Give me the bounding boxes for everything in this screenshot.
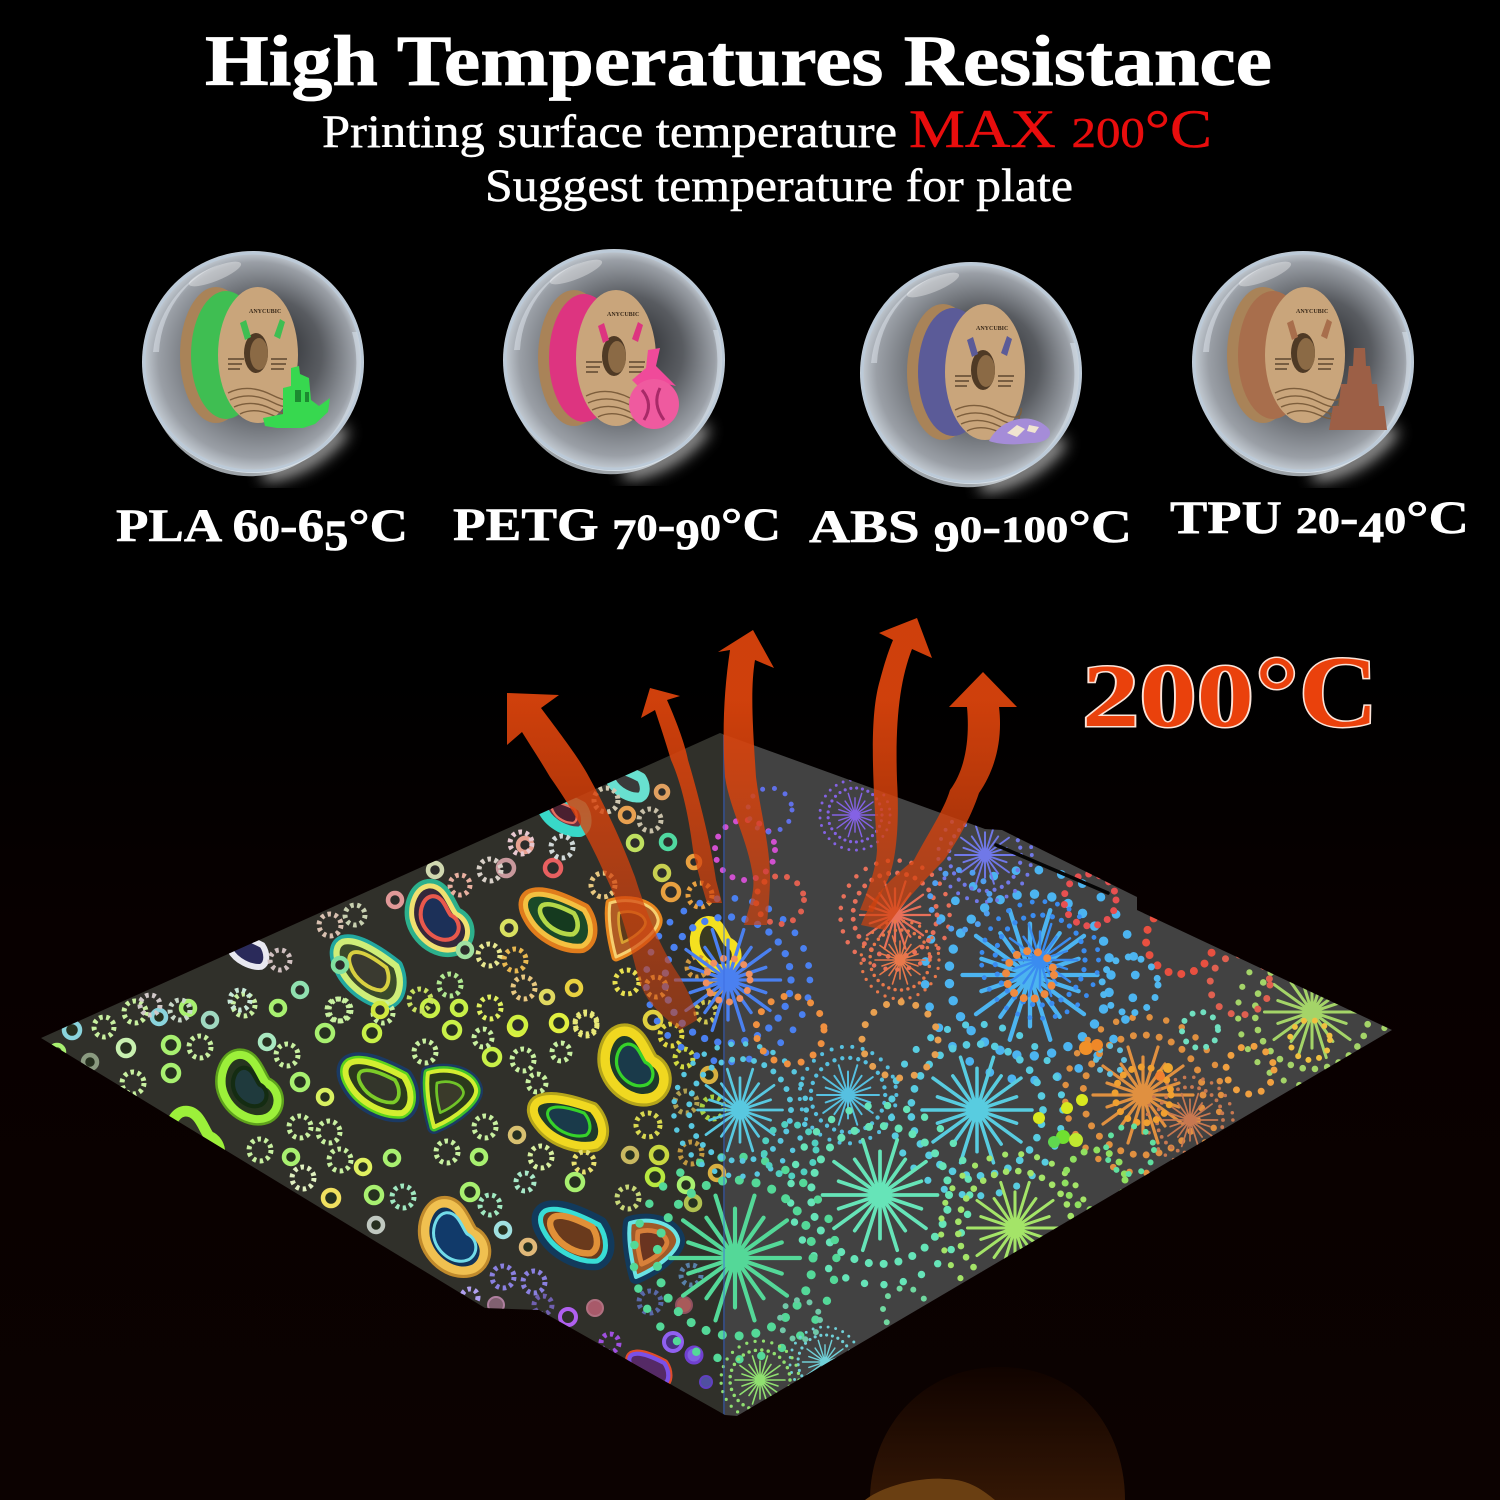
label: ABS: -100°C bbox=[982, 501, 1121, 553]
plate left: upper multicolour rings bbox=[203, 786, 722, 1033]
label: PETG: 7 bbox=[612, 512, 637, 559]
label: PLA: PLA 6 0-6 bbox=[116, 500, 319, 552]
plate centre seam bbox=[723, 735, 725, 1416]
plate slit bbox=[996, 845, 1108, 893]
material: TPU bbox=[1170, 251, 1469, 552]
label: PETG: °C bbox=[721, 499, 774, 551]
icon: ABS bubble with purple spool and printed part bbox=[860, 262, 1082, 487]
arrow 5 bbox=[861, 672, 1017, 930]
icon: PLA bubble with green spool and boat bbox=[142, 251, 364, 476]
label: TPU: 0 bbox=[1384, 501, 1406, 542]
label: PETG: 0 bbox=[700, 508, 721, 549]
label: ABS: 9 bbox=[934, 514, 960, 561]
plate right: bright highlight dots bbox=[1033, 1039, 1173, 1148]
label: PLA: 5 bbox=[324, 513, 348, 560]
plate base bbox=[41, 733, 1392, 1416]
arrow 1 bbox=[507, 693, 697, 1030]
label: PETG: PETG bbox=[453, 499, 581, 551]
plate left: green rings bbox=[50, 1000, 724, 1254]
plate left: purple lower rings bbox=[462, 1265, 712, 1388]
subtitle: suggested plate temperature: Suggest temperature for plate bbox=[485, 160, 1073, 212]
material: PLA bbox=[116, 251, 408, 560]
icon: PETG bubble with pink spool and pumpkin bbox=[503, 249, 725, 474]
subtitle: maximum surface temperature bbox=[322, 99, 1212, 159]
material: ABS bbox=[809, 262, 1132, 561]
arrow 3 bbox=[718, 630, 774, 925]
arrow 2 bbox=[641, 688, 722, 903]
label: PETG: 9 bbox=[675, 512, 700, 559]
label: PLA: °C bbox=[348, 500, 408, 552]
material: PETG bbox=[453, 249, 781, 559]
subtitle: maximum surface temperature: MAX 200°C bbox=[909, 99, 1212, 159]
label: ABS: ABS bbox=[809, 501, 900, 553]
temperature callout: 200°C: 200 bbox=[1082, 647, 1254, 746]
plate right half: fireworks bbox=[634, 780, 1386, 1419]
title: High Temperatures Resistance bbox=[205, 21, 1272, 101]
build plate bbox=[41, 733, 1392, 1416]
arrow 4 bbox=[860, 618, 932, 912]
label: TPU: °C bbox=[1406, 492, 1459, 544]
subtitle: maximum surface temperature: Printing surface temperature bbox=[322, 106, 897, 158]
background glow: lower bokeh bbox=[865, 1367, 1125, 1500]
label: ABS: 0 bbox=[960, 510, 982, 551]
icon: TPU bubble with brown spool and pagoda bbox=[1192, 251, 1414, 476]
plate left half: heart pattern bbox=[50, 769, 737, 1388]
temperature callout: 200°C: °C bbox=[1255, 636, 1378, 749]
plate right: burst cores and dot clusters bbox=[706, 788, 1330, 1340]
label: PETG: 0 bbox=[637, 508, 658, 549]
label: TPU: 4 bbox=[1359, 505, 1384, 552]
temperature callout: 200°C bbox=[1082, 636, 1378, 749]
plate left: green flower rings bbox=[94, 994, 724, 1215]
heat arrows bbox=[507, 618, 1017, 1030]
label: TPU: TPU 20- bbox=[1170, 492, 1356, 544]
label: PETG: - bbox=[658, 499, 673, 551]
